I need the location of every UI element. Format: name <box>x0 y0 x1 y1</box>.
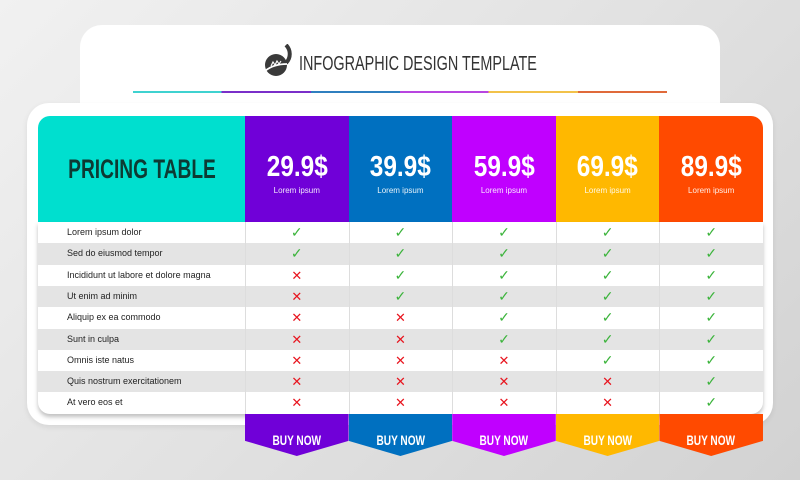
row 3: ✓ <box>498 267 510 283</box>
row 3: ✓ <box>705 267 717 283</box>
row 3: Incididunt ut labore et dolore magna <box>67 270 211 280</box>
row 2: ✓ <box>705 245 717 261</box>
row 2: Sed do eiusmod tempor <box>67 248 163 258</box>
row 2: ✓ <box>498 245 510 261</box>
price: 69.9: 69.9$ <box>577 151 638 183</box>
price: 29.9: 29.9$ <box>266 151 327 183</box>
price: 89.9 <box>659 116 763 222</box>
row 5 <box>67 309 717 325</box>
title with logo <box>265 44 537 76</box>
row 6: ✕ <box>291 332 302 346</box>
row 1: ✓ <box>498 224 510 240</box>
price: 39.9: 39.9$ <box>370 151 431 183</box>
row 6: ✓ <box>705 330 717 346</box>
row 9 <box>67 394 717 410</box>
white card: body <box>27 103 773 425</box>
row 7: ✕ <box>499 353 509 368</box>
row 1: ✓ <box>705 224 717 240</box>
body background <box>38 222 763 414</box>
row 9: ✕ <box>499 395 509 410</box>
row 5: ✓ <box>705 309 717 325</box>
row 4: ✓ <box>498 288 510 304</box>
row 2 <box>67 245 717 261</box>
row 1: ✓ <box>395 224 406 240</box>
button 1: BUY NOW <box>273 432 321 448</box>
row 7: ✓ <box>602 352 613 368</box>
button 2: BUY NOW <box>376 432 425 448</box>
row 7 <box>67 352 717 368</box>
button 3: BUY NOW <box>480 432 528 448</box>
row 8: ✕ <box>602 374 613 389</box>
row 5: ✕ <box>291 310 302 325</box>
header: pricing table title <box>38 116 245 222</box>
row 1 <box>67 224 717 240</box>
row 6: ✕ <box>395 332 406 346</box>
price: 39.9 <box>349 116 452 222</box>
title text: INFOGRAPHIC DESIGN TEMPLATE <box>299 53 537 75</box>
row 5: ✓ <box>498 309 510 325</box>
button 4: BUY NOW <box>583 432 632 448</box>
row 6: Sunt in culpa <box>67 334 119 344</box>
row 7: ✓ <box>705 352 717 368</box>
row 8 <box>67 373 717 389</box>
icon: logo <box>265 44 292 76</box>
row 9: At vero eos et <box>67 397 123 407</box>
row 7: ✕ <box>395 353 406 368</box>
row 3: ✕ <box>291 268 302 283</box>
row 9: ✕ <box>602 395 613 410</box>
row 8: ✕ <box>291 374 302 389</box>
row 1: ✓ <box>291 224 303 240</box>
button 3 <box>452 414 556 456</box>
button 5 <box>659 414 763 456</box>
row 3: ✓ <box>602 267 613 283</box>
row 4: Ut enim ad minim <box>67 291 137 301</box>
row 9: ✕ <box>395 395 406 410</box>
buy now buttons <box>245 414 763 456</box>
row 8: ✕ <box>395 374 406 389</box>
button 2 <box>349 414 452 456</box>
price: 29.9: Lorem ipsum <box>274 186 320 195</box>
price: 59.9: 59.9$ <box>473 151 534 183</box>
colored divider line <box>133 91 667 93</box>
row 4 <box>67 288 717 304</box>
row 3: ✓ <box>395 267 406 283</box>
price: 69.9: Lorem ipsum <box>584 186 631 195</box>
white card: top tab <box>80 25 720 135</box>
row 5: ✕ <box>395 310 406 325</box>
row 9: ✓ <box>705 394 717 410</box>
price: 89.9: 89.9$ <box>681 151 742 183</box>
button 4 <box>556 414 659 456</box>
row 2: ✓ <box>395 245 406 261</box>
row 6: ✓ <box>602 330 613 346</box>
price: 59.9: Lorem ipsum <box>481 186 527 195</box>
row 4: ✓ <box>705 288 717 304</box>
row 7: Omnis iste natus <box>67 355 134 365</box>
row 8: Quis nostrum exercitationem <box>67 376 182 386</box>
row 9: ✕ <box>291 395 302 410</box>
row 5: Aliquip ex ea commodo <box>67 312 161 322</box>
row 6 <box>67 330 717 346</box>
row 4: ✓ <box>395 288 406 304</box>
row 4: ✕ <box>291 289 302 304</box>
header: pricing table title: PRICING TABLE <box>68 154 216 184</box>
price: 29.9 <box>245 116 349 222</box>
row 2: ✓ <box>291 245 303 261</box>
button 5: BUY NOW <box>687 432 735 448</box>
price: 59.9 <box>452 116 556 222</box>
row 1: Lorem ipsum dolor <box>67 227 142 237</box>
table header <box>38 116 763 222</box>
row 8: ✓ <box>705 373 717 389</box>
button 1 <box>245 414 349 456</box>
row 2: ✓ <box>602 245 613 261</box>
row 4: ✓ <box>602 288 613 304</box>
price: 69.9 <box>556 116 659 222</box>
row 7: ✕ <box>291 353 302 368</box>
row 6: ✓ <box>498 330 510 346</box>
price: 89.9: Lorem ipsum <box>688 186 734 195</box>
row 3 <box>67 267 717 283</box>
price: 39.9: Lorem ipsum <box>377 186 424 195</box>
row 8: ✕ <box>499 374 509 389</box>
row 5: ✓ <box>602 309 613 325</box>
row 1: ✓ <box>602 224 613 240</box>
